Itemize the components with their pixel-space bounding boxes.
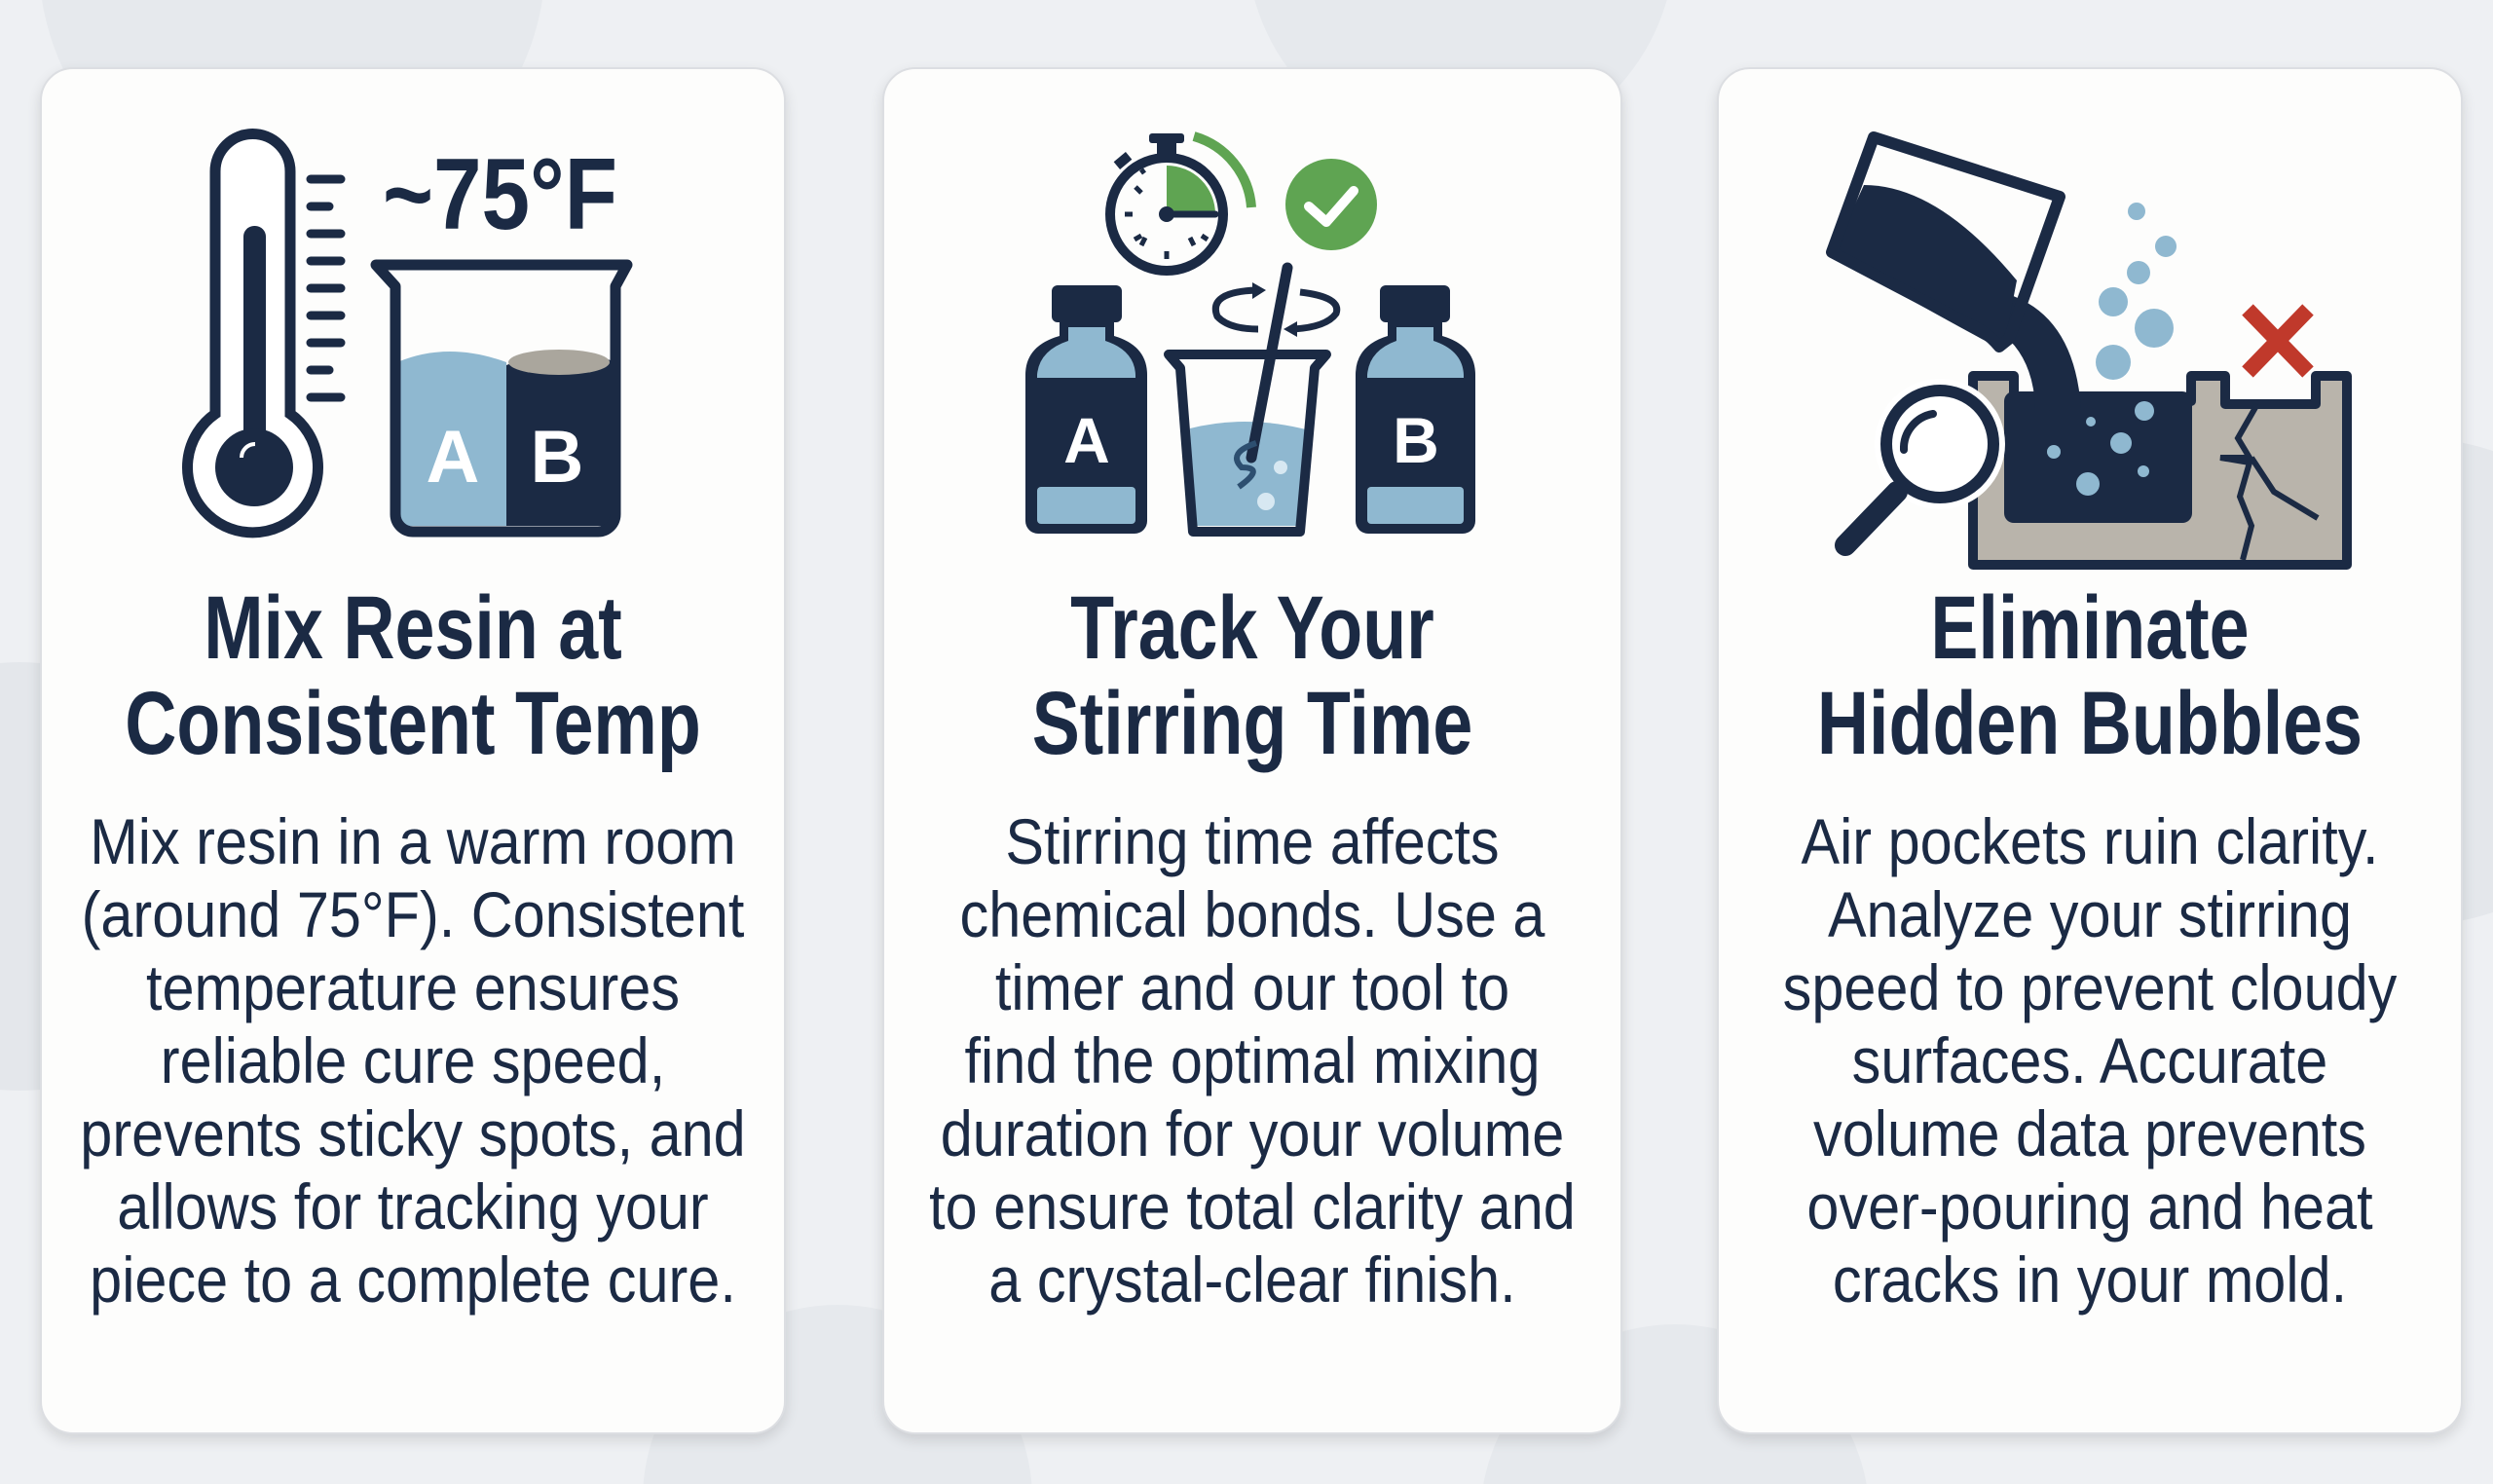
heading: [1032, 578, 1472, 773]
heading: [1817, 578, 2363, 773]
pitcher: [1832, 137, 2060, 347]
text block: Analyze your stirring: [1828, 878, 2352, 950]
text block: piece to a complete cure.: [90, 1243, 736, 1316]
icon: check: [1285, 159, 1377, 250]
text block: over-pouring and heat: [1806, 1170, 2373, 1243]
heading: [125, 578, 701, 773]
bottle B: [1356, 285, 1475, 534]
stopwatch: [1110, 133, 1251, 271]
panel: stirring time: [882, 67, 1622, 1434]
stream: [1991, 292, 2081, 409]
text block: Air pockets ruin clarity.: [1801, 805, 2379, 877]
text block: a crystal-clear finish.: [988, 1243, 1516, 1316]
beaker: A: [427, 416, 479, 499]
bottle B: B: [1393, 404, 1439, 476]
mixing cup: [1169, 268, 1337, 532]
text block: Mix resin in a warm room: [90, 805, 736, 877]
text block: temperature ensures: [146, 951, 680, 1023]
heading: Stirring Time: [1032, 674, 1472, 773]
beaker: [376, 265, 627, 532]
heading: Eliminate: [1930, 578, 2250, 678]
text block: [80, 805, 746, 1316]
text block: chemical bonds. Use a: [960, 878, 1544, 950]
text block: reliable cure speed,: [161, 1024, 665, 1096]
text block: volume data prevents: [1813, 1097, 2366, 1169]
icon: red x: [2248, 310, 2308, 372]
text block: surfaces. Accurate: [1852, 1024, 2327, 1096]
text block: Stirring time affects: [1005, 805, 1500, 877]
text block: to ensure total clarity and: [929, 1170, 1576, 1243]
bottle A: A: [1063, 404, 1110, 476]
text block: find the optimal mixing: [965, 1024, 1540, 1096]
heading: Mix Resin at: [204, 578, 622, 678]
arrows: [1215, 290, 1337, 329]
text block: [929, 805, 1576, 1316]
text block: duration for your volume: [941, 1097, 1564, 1169]
icon: pouring, bubbles and mold: [1826, 131, 2352, 570]
beaker: B: [531, 416, 583, 499]
text block: timer and our tool to: [995, 951, 1509, 1023]
text block: prevents sticky spots, and: [80, 1097, 746, 1169]
bubbles: [2047, 203, 2177, 496]
heading: Consistent Temp: [125, 674, 701, 773]
panel: bubbles: [1717, 67, 2463, 1434]
text block: cracks in your mold.: [1833, 1243, 2347, 1316]
text block: allows for tracking your: [117, 1170, 709, 1243]
icon: stopwatch, bottles and cup: [1025, 131, 1475, 537]
temperature label: ~75°F: [383, 138, 617, 251]
text block: [1783, 805, 2398, 1316]
text block: (around 75°F). Consistent: [82, 878, 744, 950]
heading: Track Your: [1070, 578, 1434, 678]
icon: magnifier: [1845, 386, 1998, 545]
panel: temperature: [40, 67, 786, 1434]
bottle A: [1025, 285, 1147, 534]
mold: [1973, 376, 2347, 565]
icon: thermometer and beaker: [182, 129, 633, 538]
text block: speed to prevent cloudy: [1783, 951, 2397, 1023]
thermometer: [187, 134, 317, 533]
heading: Hidden Bubbles: [1817, 674, 2363, 773]
